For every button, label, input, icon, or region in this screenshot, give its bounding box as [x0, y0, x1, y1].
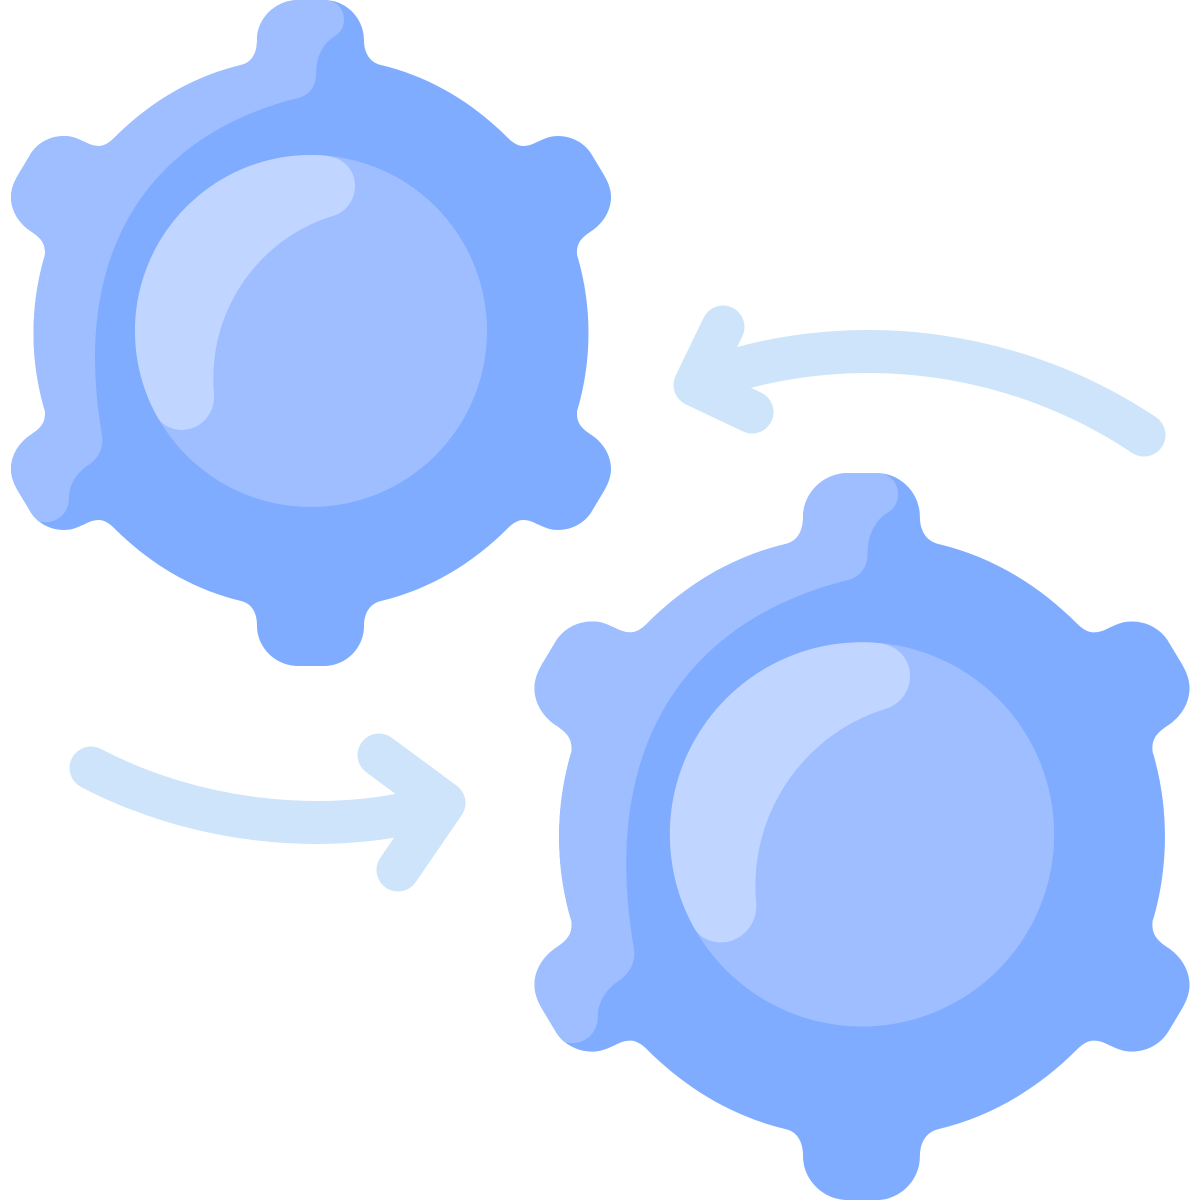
gear body: [535, 473, 1190, 1200]
gear hub: [670, 642, 1054, 1026]
arrow: lower left, pointing right toward bottom gear: [91, 755, 444, 870]
arrow: top right, pointing left toward top gear: [695, 327, 1144, 435]
hub highlight: [135, 155, 355, 430]
gear: top left: [11, 0, 611, 666]
hub highlight: [670, 642, 910, 942]
gear body: [11, 0, 611, 666]
gear: bottom right: [535, 473, 1190, 1200]
gear hub: [135, 155, 487, 507]
gear body highlight: [535, 473, 898, 1043]
gear body highlight: [11, 0, 344, 522]
